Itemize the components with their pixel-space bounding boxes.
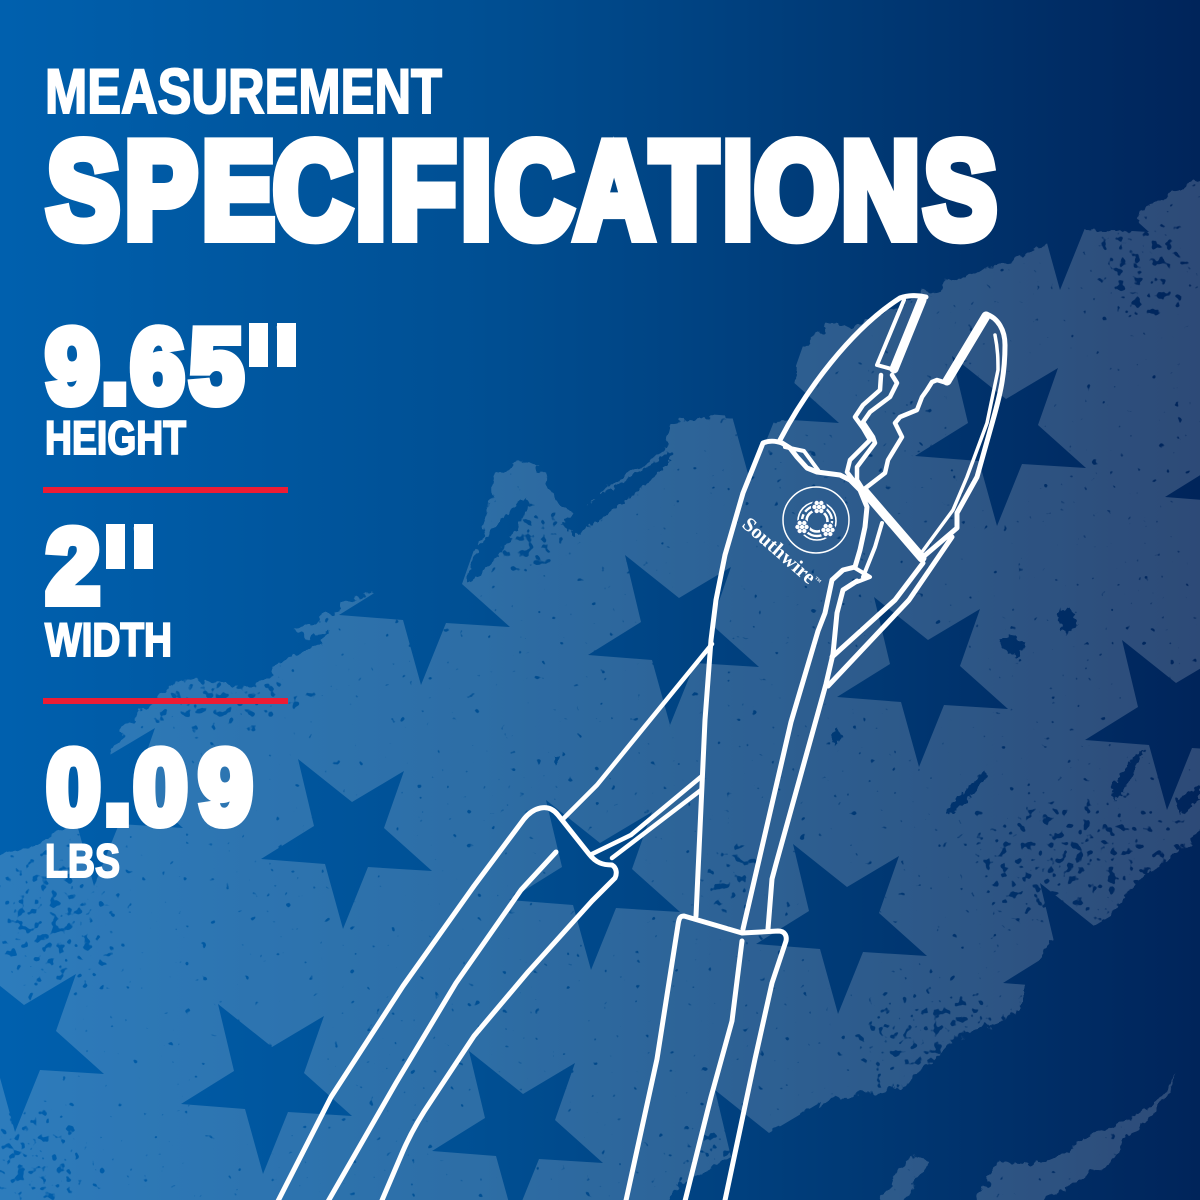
right handle strip: [768, 581, 857, 929]
spec: width: ": [99, 500, 159, 642]
upper jaw teeth: [847, 375, 897, 488]
head detail marks: [785, 447, 882, 582]
spec: height: ": [242, 299, 302, 441]
spec: height: HEIGHT: [45, 411, 186, 464]
left grip: [276, 808, 616, 1200]
upper jaw thick face: [894, 300, 922, 369]
spec: height: 9.65: [46, 309, 243, 425]
pivot diagonal bar: [865, 492, 922, 558]
lower jaw outer edge: [923, 314, 1005, 557]
spec: weight: LBS: [45, 834, 120, 887]
spec: width: 2: [46, 509, 100, 625]
reins toward handle: [828, 537, 952, 686]
title line one: MEASUREMENT: [45, 57, 442, 127]
head and left body edge: [696, 441, 867, 929]
right grip: [625, 916, 786, 1200]
lower jaw thick face: [947, 316, 986, 381]
upper jaw inner line: [877, 300, 904, 370]
divider two: [43, 698, 288, 704]
divider one: [43, 487, 288, 493]
title line two: SPECIFICATIONS: [47, 116, 997, 267]
spec: width: WIDTH: [45, 613, 172, 666]
brand name: Southwire: [738, 513, 818, 587]
spec: width: [45, 500, 172, 666]
spec: height: [45, 299, 302, 464]
upper jaw outline: [780, 296, 926, 440]
logo badge: [783, 487, 849, 553]
brand name: ™: [812, 575, 823, 586]
left arm lines: [564, 644, 712, 858]
spec: weight: 0.09: [47, 730, 252, 846]
lower jaw inner edge: [922, 335, 998, 552]
pliers line drawing: [276, 296, 1005, 1200]
lower jaw teeth: [863, 380, 947, 490]
